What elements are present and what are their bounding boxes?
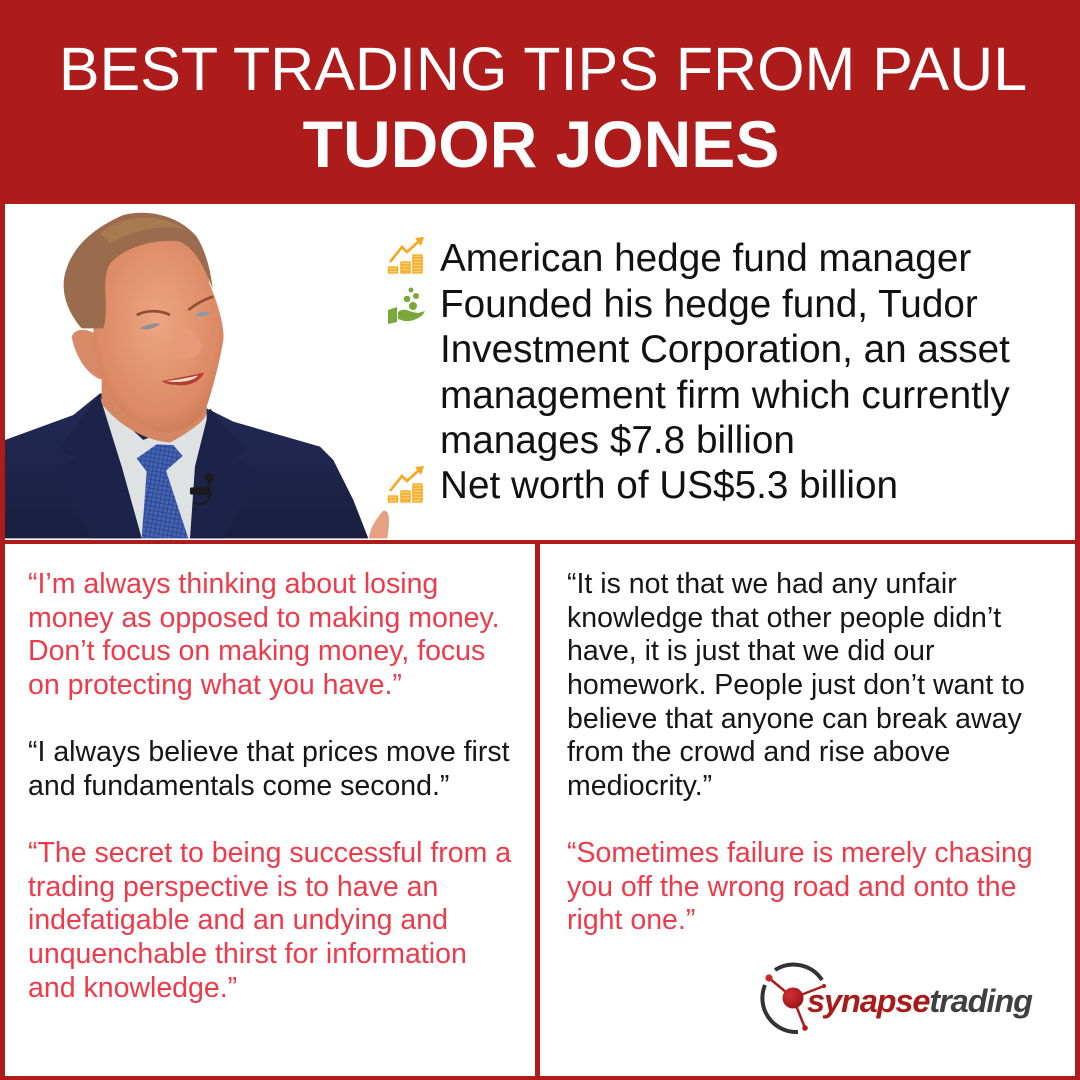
bullet list: manages $7.8 billion (440, 419, 795, 462)
panel: right quotes (540, 544, 1075, 1076)
quote: secret to success: unquenchable thirst for information (28, 938, 467, 970)
quote: failure: you off the wrong road and onto the (567, 871, 1016, 903)
title: TUDOR JONES (303, 107, 779, 181)
icon: rising chart over coins (388, 466, 424, 502)
quote: losing money (28, 568, 500, 701)
title: BEST TRADING TIPS FROM PAUL (59, 35, 1027, 103)
quote: secret to success: trading perspective is to have an (28, 871, 438, 903)
quote: homework: from the crowd and rise above (567, 736, 950, 768)
quote: homework: homework. People just don’t want to (567, 669, 1025, 701)
bullet list: American hedge fund manager (440, 237, 971, 280)
quote: failure: right one.” (567, 904, 695, 936)
quote: secret to success (28, 837, 511, 1004)
icon: hand holding coins (388, 288, 425, 324)
quote: losing money: Don’t focus on making money, focus (28, 635, 485, 667)
quote: losing money: on protecting what you have.” (28, 669, 402, 701)
quote: homework: mediocrity.” (567, 770, 712, 802)
quote: homework: have, it is just that we did our (567, 635, 935, 667)
bullet list (440, 237, 1010, 507)
quote: homework (567, 568, 1025, 802)
panel: left quotes (5, 544, 535, 1076)
quote: failure: “Sometimes failure is merely chasing (567, 837, 1033, 869)
quote: homework: “It is not that we had any unfair (567, 568, 957, 600)
quote: losing money: money as opposed to making money. (28, 602, 500, 634)
quote: secret to success: indefatigable and an undying and (28, 904, 448, 936)
bullet list: management firm which currently (440, 374, 1010, 417)
title (59, 35, 1027, 181)
quote: homework: knowledge that other people didn’t (567, 602, 1001, 634)
bullet list: Investment Corporation, an asset (440, 328, 1010, 371)
quote: secret to success: “The secret to being successful from a (28, 837, 511, 869)
icon: rising chart over coins (388, 237, 424, 273)
portrait of Paul Tudor Jones (5, 213, 389, 538)
quote: prices first: and fundamentals come second.” (28, 770, 449, 802)
quote: losing money: “I’m always thinking about losing (28, 568, 438, 600)
bullet list: Founded his hedge fund, Tudor (440, 283, 978, 326)
quote: homework: believe that anyone can break away (567, 703, 1022, 735)
quote: prices first: “I always believe that prices move first (28, 736, 510, 768)
logo: synapsetrading: synapsetrading (807, 983, 1033, 1019)
quote: prices first (28, 736, 510, 802)
logo: synapsetrading (762, 965, 1033, 1032)
quote: secret to success: and knowledge.” (28, 972, 237, 1004)
quote: failure (567, 837, 1033, 936)
bullet list: Net worth of US$5.3 billion (440, 464, 898, 507)
panel: profile (5, 204, 1075, 540)
